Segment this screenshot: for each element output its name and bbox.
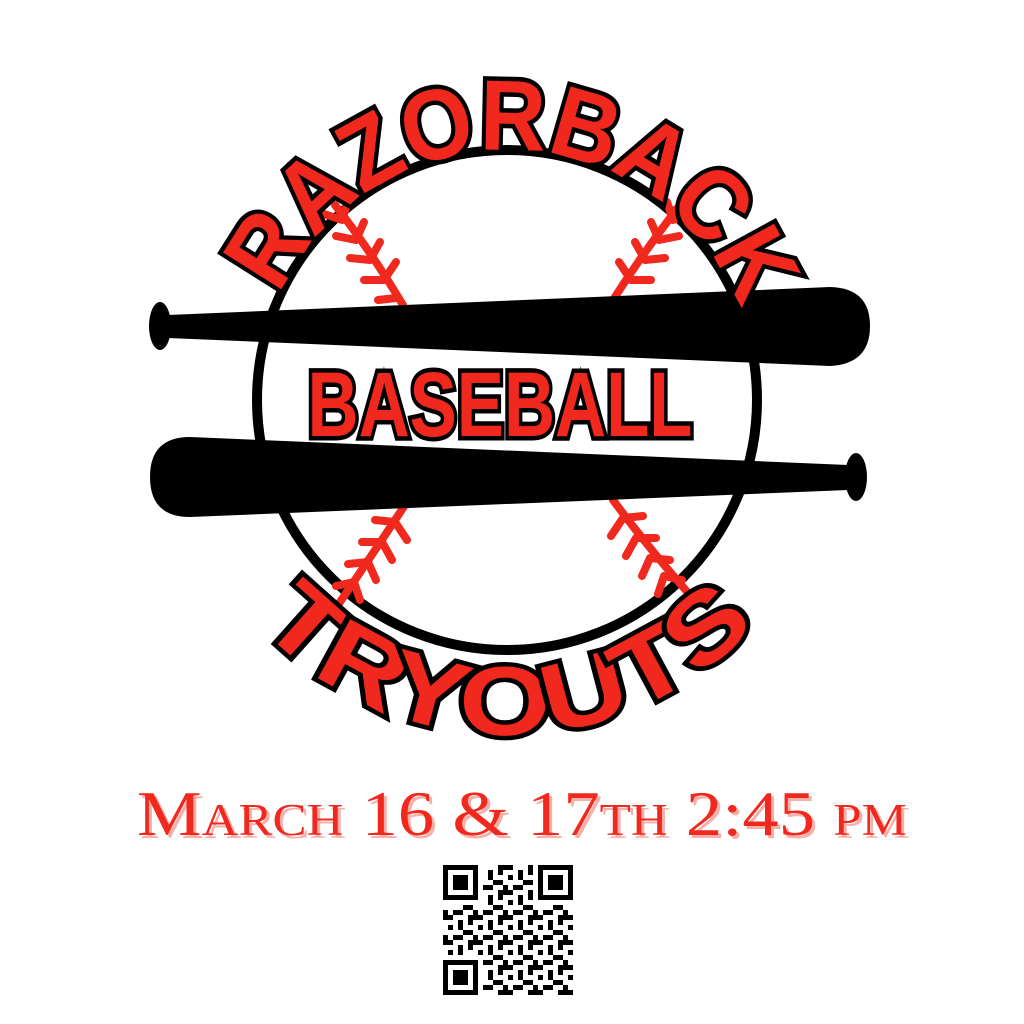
date text: March 16 & 17th 2:45 pm	[140, 781, 910, 852]
title: TRYOUTS: TRYOUTS	[270, 570, 750, 740]
date text: March 16 & 17th 2:45 pm	[137, 778, 907, 849]
seams	[324, 202, 691, 605]
bottom bat	[150, 437, 867, 517]
title: RAZORBACK: RAZORBACK	[217, 76, 810, 308]
QR code	[443, 865, 573, 995]
baseball circle	[257, 150, 757, 650]
title: BASEBALL: BASEBALL	[308, 354, 692, 456]
top bat	[149, 287, 870, 366]
